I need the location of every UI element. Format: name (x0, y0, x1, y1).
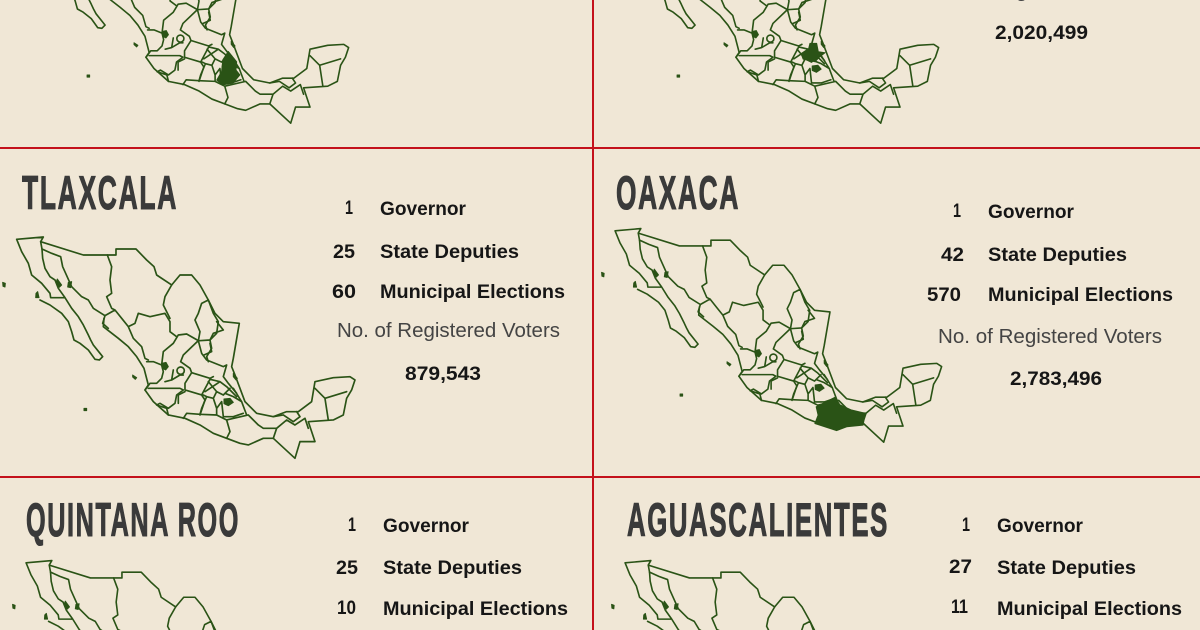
stat: municipal elections: Municipal Elections (380, 281, 565, 303)
stat: state deputies: 27 (949, 556, 972, 578)
heading: Tlaxcala: TLAXCALA (22, 166, 178, 219)
stat: governor (345, 197, 466, 220)
stat: governor: Governor (380, 198, 466, 220)
stat: municipal elections: Municipal Elections (383, 598, 568, 620)
number: registered voters: 2,020,499 (995, 22, 1088, 44)
stat: state deputies (949, 556, 1136, 579)
stat: state deputies: State Deputies (380, 241, 519, 263)
panel: Tlaxcala (3, 166, 565, 458)
stat: governor: Governor (997, 515, 1083, 537)
stat: governor: 1 (348, 514, 356, 536)
stat: state deputies: 25 (336, 557, 358, 579)
stat: governor (953, 200, 1074, 223)
heading: Quintana Roo: QUINTANA ROO (26, 493, 240, 546)
stat: state deputies: 25 (333, 241, 355, 263)
map: Hidalgo highlighted (599, 0, 939, 123)
number: registered voters: 2,783,496 (1010, 368, 1102, 390)
stat: state deputies: State Deputies (988, 244, 1127, 266)
stat: municipal elections: 10 (337, 597, 356, 619)
stat: governor (348, 514, 469, 537)
panel: Quintana Roo (13, 493, 568, 630)
map: Aguascalientes (612, 561, 952, 630)
stat: municipal elections: Municipal Elections (988, 284, 1173, 306)
number: registered voters: 879,543 (405, 363, 481, 385)
map: Oaxaca highlighted (602, 229, 942, 442)
stat: governor: 1 (962, 514, 970, 536)
panel: Aguascalientes (612, 493, 1182, 630)
map: Puebla highlighted (9, 0, 349, 123)
stat: governor: Governor (988, 201, 1074, 223)
stat: governor: 1 (953, 200, 961, 222)
panel: Hidalgo (top right) (599, 0, 1153, 123)
stat: municipal elections: 60 (332, 281, 356, 303)
stat: municipal elections: Municipal Elections (997, 598, 1182, 620)
panel: Oaxaca (602, 166, 1173, 442)
text: registered voters: No. of Registered Voters (337, 319, 560, 342)
panel: Puebla (top left) (9, 0, 349, 123)
heading: Aguascalientes: AGUASCALIENTES (627, 493, 889, 546)
stat: governor: Governor (383, 515, 469, 537)
stat: state deputies: 42 (941, 244, 964, 266)
stat: state deputies: State Deputies (997, 557, 1136, 579)
stat: state deputies: State Deputies (383, 557, 522, 579)
stat: municipal elections: 570 (927, 284, 961, 306)
heading: Oaxaca: OAXACA (616, 166, 740, 219)
stat: municipal elections: 11 (951, 596, 968, 618)
stat: governor (962, 514, 1083, 537)
map: Tlaxcala highlighted (3, 237, 355, 458)
text: registered voters: No. of Registered Voters (938, 325, 1162, 348)
map: Quintana Roo (13, 561, 353, 630)
stat: governor: 1 (345, 197, 353, 219)
